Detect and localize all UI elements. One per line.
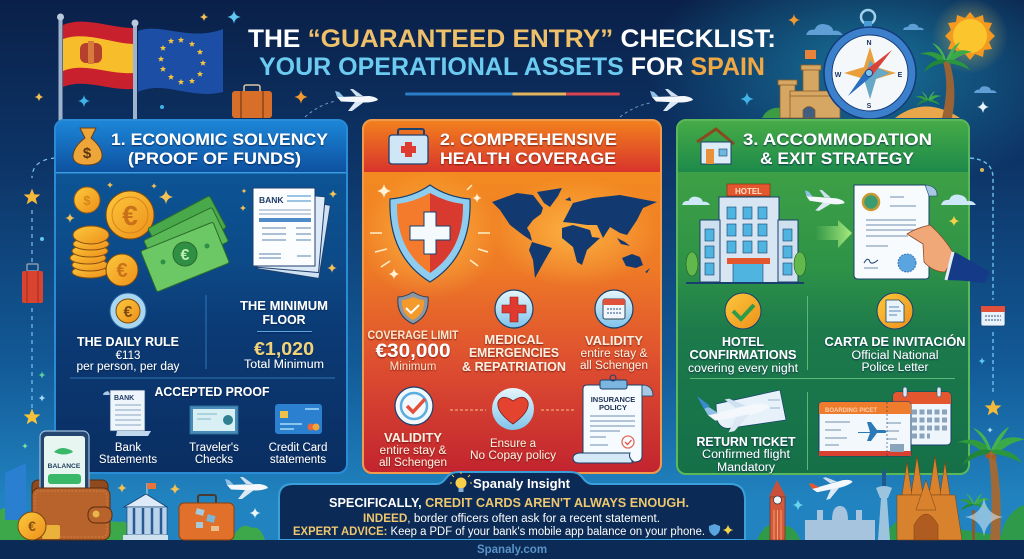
big ben — [769, 480, 786, 540]
panel 3: accommodation — [677, 120, 990, 474]
carta de invitacion text: Official National — [852, 350, 938, 362]
panel 3 heading: 3. ACCOMMODATION — [743, 130, 932, 149]
return ticket text: Confirmed flight — [702, 449, 791, 461]
plane in panel 3 — [803, 188, 846, 213]
validity text right: VALIDITY — [585, 333, 643, 348]
icon: mini shield and sparkle — [709, 524, 733, 536]
icon: small shield — [398, 292, 428, 324]
validity text left: all Schengen — [379, 457, 447, 469]
illustration: calendar — [893, 387, 951, 445]
illustration: coins: $ — [83, 193, 91, 208]
return ticket text: RETURN TICKET — [696, 434, 796, 449]
glow behind map — [490, 177, 660, 287]
validity text left: VALIDITY — [384, 430, 442, 445]
illustration: hotel: HOTEL — [735, 187, 762, 196]
sparkles bottom left — [117, 483, 180, 494]
proof labels: Checks — [195, 454, 233, 466]
icon: heart — [492, 388, 534, 430]
sagrada familia — [897, 456, 962, 540]
no copay text: No Copay policy — [470, 450, 556, 462]
sparkles: left lower — [22, 371, 46, 449]
hotel confirmations text: covering every night — [688, 363, 799, 375]
illustration: banknotes: € — [181, 247, 190, 264]
flag poles — [57, 14, 138, 122]
icon: phone with balance — [40, 431, 89, 499]
planes: top — [305, 89, 693, 117]
coverage limit text — [368, 330, 458, 373]
bushes right — [757, 505, 1024, 540]
dashed route: left — [32, 158, 55, 410]
icon: phone with balance: BALANCE — [48, 463, 81, 470]
sun — [932, 0, 1008, 74]
insurance policy document: POLICY — [599, 403, 627, 412]
icon: coin stack and euro coin — [18, 512, 60, 540]
compass letters: N — [866, 40, 872, 47]
icon: coin stack and euro coin: € — [28, 518, 36, 534]
proof labels: Credit Card — [269, 442, 327, 454]
title line 1: THE “GUARANTEED ENTRY” CHECKLIST: — [248, 25, 776, 53]
palm — [920, 42, 972, 118]
proof labels: statements — [270, 454, 326, 466]
insight line 3: EXPERT ADVICE: Keep a PDF of your bank's mobile app balance on your phone. — [293, 526, 705, 538]
validity text right: entire stay & — [580, 348, 648, 360]
sparkles: top — [34, 10, 989, 113]
carta de invitacion text: CARTA DE INVITACIÓN — [824, 334, 966, 349]
panel 3 heading band — [678, 121, 968, 172]
title underline — [405, 92, 620, 96]
illustration: bank statement: BANK — [259, 195, 284, 205]
illustration: hotel — [686, 184, 806, 284]
panel 3 heading: & EXIT STRATEGY — [760, 149, 915, 168]
small palm right — [958, 493, 990, 540]
star: left lower — [24, 409, 40, 424]
validity text left: entire stay & — [380, 445, 447, 457]
icon: check badge — [725, 293, 761, 329]
Spanish flag — [63, 22, 133, 89]
top right scene — [762, 0, 1008, 119]
insight heading: Spanaly Insight — [473, 477, 571, 491]
panel 2 heading band — [364, 121, 660, 172]
illustration: plane ticket — [697, 390, 786, 436]
insurance policy document: INSURANCE — [591, 395, 635, 404]
minimum floor: €1,020 — [254, 338, 314, 359]
no copay text: Ensure a — [490, 438, 537, 450]
icon: red suitcase — [22, 264, 43, 303]
proof labels: Statements — [99, 454, 157, 466]
carta de invitacion text: Police Letter — [862, 362, 929, 374]
illustration: boarding pass: BOARDING PICET — [825, 408, 877, 414]
validity text right: all Schengen — [580, 360, 648, 372]
sparkles: panel 1 — [65, 182, 337, 273]
coverage limit text: Minimum — [390, 361, 436, 373]
validity text left — [379, 430, 447, 469]
icon: document badge — [877, 293, 913, 329]
title line 2: YOUR OPERATIONAL ASSETS FOR SPAIN — [259, 53, 765, 81]
validity text right — [580, 333, 648, 372]
coverage limit text: €30,000 — [376, 341, 450, 362]
dashed route: right — [970, 158, 993, 395]
return ticket text — [696, 434, 796, 474]
panel 2: health coverage — [360, 120, 661, 473]
small dot — [40, 237, 44, 241]
insight container — [279, 472, 745, 540]
medical emergencies text: & REPATRIATION — [462, 359, 566, 374]
title — [248, 25, 776, 96]
panel 2 heading: HEALTH COVERAGE — [440, 149, 616, 168]
icon: bank building — [123, 483, 168, 540]
palace — [805, 506, 875, 540]
illustration: coins: € — [116, 260, 128, 282]
bottom right scene — [757, 427, 1024, 540]
minimum floor — [240, 298, 328, 371]
skyline left — [5, 463, 26, 520]
medical emergencies text — [462, 332, 566, 374]
panel 1 frame — [55, 120, 347, 473]
sparkle bottom right — [793, 500, 803, 510]
hand holding letter — [907, 225, 990, 283]
minimum floor: FLOOR — [262, 312, 306, 327]
EU flag — [138, 29, 223, 94]
icon: euro coin: € — [124, 304, 133, 321]
panel 3 heading — [743, 130, 932, 168]
icon: traveler's check — [190, 406, 238, 434]
compass letters: E — [898, 72, 903, 79]
icon: bank statement scroll — [103, 390, 151, 436]
panel 1 heading: (PROOF OF FUNDS) — [128, 149, 301, 168]
icon: medical cross — [495, 290, 533, 328]
sparkle bottom — [250, 508, 260, 518]
plane bottom right — [808, 471, 855, 503]
flags — [57, 14, 223, 122]
wallet back — [32, 480, 108, 510]
right decorations — [978, 168, 1005, 433]
icon: money bag — [73, 128, 102, 165]
small palm — [915, 91, 941, 106]
compass letters: S — [867, 103, 872, 110]
panel 2 heading — [440, 130, 617, 168]
clouds — [806, 24, 997, 93]
daily rule: THE DAILY RULE — [77, 334, 179, 349]
sparkle in panel 3 — [949, 216, 959, 226]
panel 1 heading: 1. ECONOMIC SOLVENCY — [111, 130, 329, 149]
proof labels: Traveler's — [189, 442, 239, 454]
bottom left scene — [0, 431, 268, 540]
world map — [492, 188, 657, 278]
star: right — [985, 400, 1001, 415]
shield with cross — [390, 185, 470, 282]
coverage limit text: COVERAGE LIMIT — [368, 330, 458, 342]
bush — [762, 108, 782, 118]
icon: credit card — [275, 404, 322, 434]
icon: light bulb — [450, 472, 472, 492]
panel 2 heading: 2. COMPREHENSIVE — [440, 130, 617, 149]
sparkles and rays: shield — [370, 184, 490, 279]
panel 3 frame — [677, 120, 969, 474]
hotel confirmations text: CONFIRMATIONS — [690, 347, 797, 362]
hotel confirmations text — [688, 334, 799, 375]
illustration: coins — [70, 187, 154, 286]
hotel confirmations text: HOTEL — [722, 334, 764, 349]
daily rule — [76, 334, 180, 373]
proof labels — [99, 442, 327, 466]
palm right — [957, 427, 1024, 540]
letter of invitation — [854, 185, 937, 279]
insight line 1: SPECIFICALLY, CREDIT CARDS AREN'T ALWAYS ENOUGH. — [329, 495, 689, 510]
star: left upper — [24, 189, 40, 204]
proof labels: Bank — [115, 442, 141, 454]
icon: calendar circle — [595, 290, 633, 328]
insight line 2: INDEED, border officers often ask for a recent statement. — [363, 513, 660, 525]
icon: first aid kit — [389, 129, 428, 164]
minimum floor: Total Minimum — [244, 359, 324, 371]
illustration: boarding pass — [819, 402, 911, 456]
compass letters — [835, 40, 903, 110]
no copay text — [470, 438, 556, 462]
daily rule: per person, per day — [76, 361, 180, 373]
arrow to letter — [815, 220, 852, 248]
icon: check circle — [395, 387, 433, 425]
accepted proof heading: ACCEPTED PROOF — [154, 385, 270, 399]
island — [895, 106, 960, 118]
icon: wallet — [32, 488, 112, 540]
icon: money bag: $ — [83, 145, 92, 162]
plane bottom left — [225, 477, 268, 499]
illustration: banknotes — [141, 196, 229, 292]
bushes left — [0, 507, 265, 540]
suitcase: top — [232, 85, 272, 118]
medical emergencies text: EMERGENCIES — [469, 345, 559, 360]
carta de invitacion text — [824, 334, 966, 374]
panel 2 frame — [363, 120, 661, 473]
icon: euro coin — [110, 293, 146, 329]
panel 1: economic solvency — [55, 120, 347, 473]
left decorations — [22, 189, 46, 449]
panel 1 heading — [111, 130, 329, 168]
minimum floor: THE MINIMUM — [240, 298, 328, 313]
glow behind shield — [360, 170, 500, 300]
illustration: coins: € — [122, 200, 138, 231]
illustration: bank statement — [253, 188, 330, 278]
icon: calendar right — [981, 306, 1005, 326]
watermark sparkle — [965, 498, 1003, 536]
medical emergencies text: MEDICAL — [484, 332, 544, 347]
tower — [876, 468, 892, 540]
panel 1 heading band — [56, 121, 346, 172]
clouds in panel 3 — [682, 195, 976, 205]
castle — [778, 50, 840, 118]
icon: orange suitcase — [179, 495, 234, 540]
icon: bank statement scroll: BANK — [114, 395, 134, 402]
insight box — [278, 472, 746, 543]
compass letters: W — [835, 72, 842, 79]
return ticket text: Mandatory — [717, 462, 775, 474]
compass — [824, 10, 916, 119]
footer site name: Spanaly.com — [477, 544, 547, 556]
insurance policy document — [573, 375, 653, 463]
icon: house — [697, 129, 734, 164]
daily rule: €113 — [116, 350, 140, 362]
